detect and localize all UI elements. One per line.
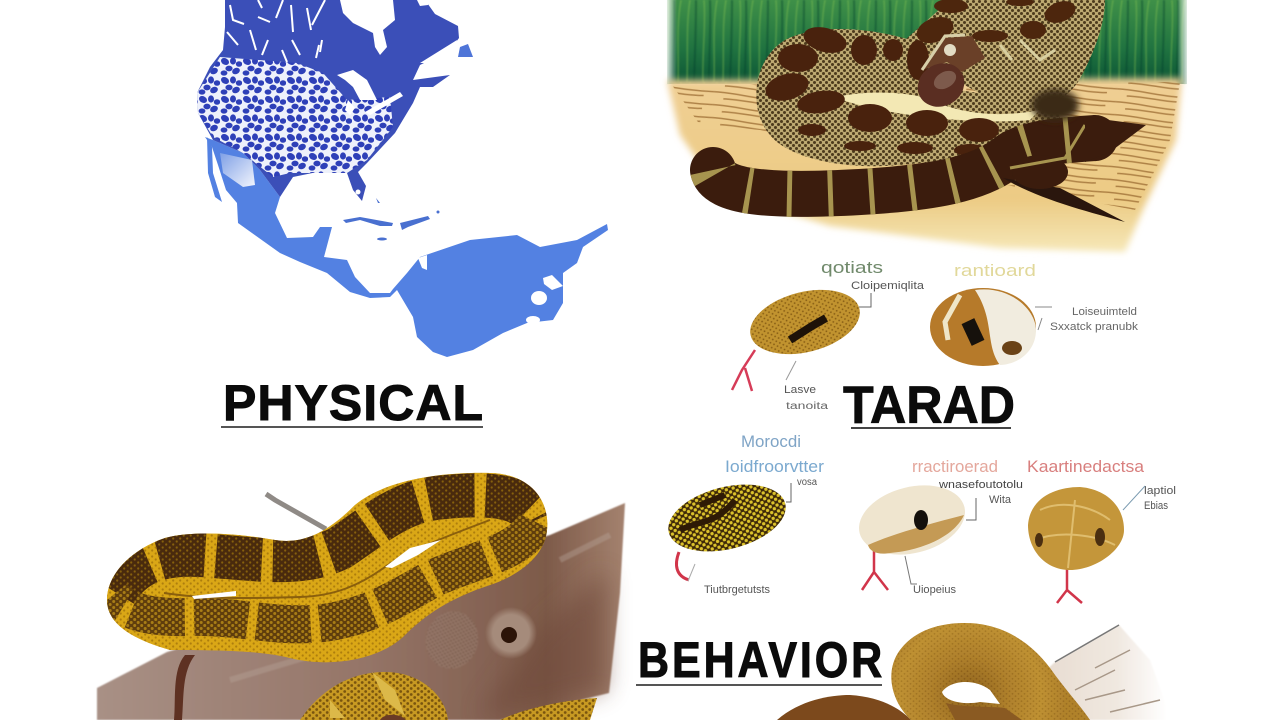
- map: Mexico, Central and South America: [205, 137, 608, 357]
- ring opening: [942, 682, 1000, 704]
- head diagram: golden viper side view: tanoita: [786, 401, 829, 412]
- head diagram: golden front view: [1027, 457, 1176, 603]
- head diagram: golden front view: Ebias: [1144, 500, 1168, 512]
- dark saddle markings: [762, 23, 1049, 156]
- head diagram: golden viper side view: [732, 258, 925, 412]
- snake: upper body mass: [905, 0, 1105, 107]
- map: Hudson Bay and lakes: [337, 0, 457, 115]
- lower coil: second golden snake: [500, 698, 597, 720]
- snake: lower coil and tail: [713, 117, 1146, 222]
- map: dotted range area: [197, 57, 393, 177]
- heading: TARAD: TARAD: [843, 376, 1015, 435]
- sandy ground: [667, 78, 1182, 252]
- panel: yellow snake on log: [97, 473, 625, 720]
- heading: BEHAVIOR: BEHAVIOR: [638, 632, 882, 688]
- panel: labelled head diagrams, first row: [732, 258, 1139, 412]
- panel: labelled head diagrams, second row: [661, 432, 1176, 603]
- dark lower coil: [777, 695, 911, 720]
- cream gap inside the coil: [835, 93, 1040, 121]
- map: Caribbean islands: [343, 198, 440, 240]
- main snake body: [107, 473, 547, 662]
- head diagram: cream and tan pattern: wnasefoutotolu: [938, 479, 1023, 491]
- head diagram: white and orange front view: Loiseuimteld: [1072, 306, 1137, 318]
- head diagram: golden front view: laptiol: [1144, 485, 1176, 497]
- map: Newfoundland: [458, 44, 473, 57]
- ochre ring: [891, 623, 1090, 720]
- twig: [266, 494, 326, 529]
- panel: range map of the Americas: [197, 0, 608, 357]
- lower strand mottled bands: [112, 522, 536, 624]
- wood grain streaks: [672, 82, 1180, 210]
- head diagram: golden viper side view: Lasve: [784, 384, 816, 396]
- panel: brown snake on pale log: [777, 623, 1167, 720]
- map: pale Sonora patch: [220, 153, 255, 187]
- head diagram: golden viper side view: qotiats: [821, 258, 883, 277]
- head diagram: cream and tan pattern: Uiopeius: [913, 584, 956, 596]
- head diagram: dark and yellow pattern: Morocdi: [741, 432, 801, 451]
- upper strand dark bands: [115, 495, 536, 592]
- head diagram: golden front view: Kaartinedactsa: [1027, 457, 1145, 476]
- snake markings clipped to body: [112, 495, 536, 624]
- head diagram: dark and yellow pattern: Ioidfroorvtter: [725, 457, 824, 476]
- grass background: [665, 0, 1189, 84]
- dark shadow near tail: [1031, 89, 1079, 121]
- heading: PHYSICAL: PHYSICAL: [223, 375, 483, 431]
- log: [97, 503, 625, 720]
- map: South American lakes: [356, 190, 563, 324]
- head diagram: dark and yellow pattern: [661, 432, 824, 596]
- connecting brown body: [946, 703, 1022, 720]
- head diagram: cream and tan pattern: [852, 457, 1023, 596]
- gaps between coils: [192, 540, 441, 599]
- head diagram: cream and tan pattern: Wita: [989, 494, 1012, 506]
- head diagram: cream and tan pattern: rractiroerad: [912, 457, 998, 476]
- dark divider between strands: [164, 520, 490, 598]
- snake: ring coil: [756, 23, 1060, 166]
- snake: head: [910, 35, 985, 115]
- head diagram: dark and yellow pattern: vosa: [797, 477, 817, 488]
- pale log: [1000, 625, 1167, 720]
- head diagram: white and orange front view: Sxxatck pranubk: [1050, 321, 1139, 333]
- map: North America dark region: [197, 0, 459, 201]
- lower coil: small golden snake: [300, 672, 448, 720]
- head diagram: golden viper side view: Cloipemiqlita: [851, 280, 925, 292]
- panel: rattlesnake on sand with grass: [665, 0, 1189, 252]
- head diagram: white and orange front view: [930, 261, 1139, 366]
- map: Baja California: [207, 137, 222, 202]
- map: northern stippling: [227, 0, 325, 62]
- head diagram: white and orange front view: rantioard: [954, 261, 1036, 280]
- head diagram: dark and yellow pattern: Tiutbrgetutsts: [704, 584, 770, 596]
